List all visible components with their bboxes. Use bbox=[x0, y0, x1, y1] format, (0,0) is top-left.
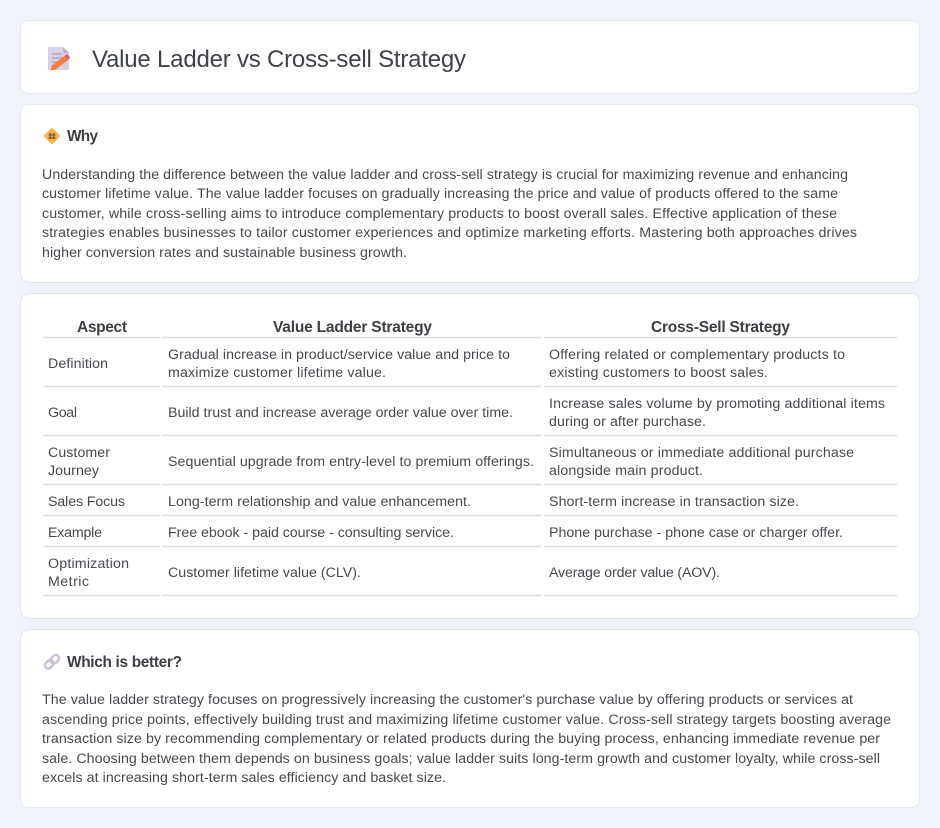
table row: sales focus: Long-term relationship and value enhancement. bbox=[168, 494, 471, 510]
table row: optimization metric: Average order value (AOV). bbox=[549, 565, 720, 581]
panel: title header bbox=[20, 20, 920, 94]
table header row: Cross-Sell Strategy bbox=[651, 319, 790, 336]
table row: sales focus: Short-term increase in transaction size. bbox=[549, 494, 799, 510]
table row: optimization metric: Metric bbox=[48, 574, 89, 590]
table row: definition: Gradual increase in product/service value and price to bbox=[168, 347, 510, 363]
table row: customer journey: alongside main product. bbox=[549, 463, 703, 479]
table row: goal: Increase sales volume by promoting additional items bbox=[549, 396, 885, 412]
text block: why paragraph: customer, while cross-selling aims to introduce complementary products to boost overall sales. Effective application of these bbox=[42, 206, 837, 222]
title: Value Ladder vs Cross-sell Strategy bbox=[92, 46, 466, 73]
table row: optimization metric: Optimization bbox=[48, 556, 129, 572]
text block: why paragraph: Understanding the difference between the value ladder and cross-sell strategy is crucial for maximizing revenue and enhancing bbox=[42, 167, 848, 183]
icon: orange diamond sign bbox=[44, 128, 60, 144]
table row: customer journey bbox=[48, 445, 854, 479]
table row: example: Phone purchase - phone case or charger offer. bbox=[549, 525, 843, 541]
table row: customer journey: Simultaneous or immediate additional purchase bbox=[549, 445, 854, 461]
text block: why paragraph: higher conversion rates and sustainable business growth. bbox=[42, 245, 407, 261]
icon: document with pencil bbox=[48, 47, 70, 70]
table row: goal: Build trust and increase average order value over time. bbox=[168, 405, 513, 421]
table header row: Value Ladder Strategy bbox=[273, 319, 432, 336]
table row: goal: during or after purchase. bbox=[549, 414, 706, 430]
heading: why: Why bbox=[67, 128, 98, 145]
table row: customer journey: Sequential upgrade from entry-level to premium offerings. bbox=[168, 454, 534, 470]
text block: which is better paragraph bbox=[42, 692, 891, 786]
text block: why paragraph bbox=[42, 167, 857, 261]
heading: which is better: Which is better? bbox=[67, 654, 182, 671]
table row: definition: Offering related or complementary products to bbox=[549, 347, 845, 363]
table row: example bbox=[48, 525, 843, 541]
table header row bbox=[77, 319, 790, 336]
table row: optimization metric bbox=[48, 556, 720, 590]
table row: customer journey: Journey bbox=[48, 463, 100, 479]
table row: sales focus bbox=[48, 494, 799, 510]
text block: which is better paragraph: ascending price points, effectively building trust and maximizing lifetime customer value. Cross-sell strategy targets boosting average bbox=[42, 712, 891, 728]
table row: customer journey: Customer bbox=[48, 445, 110, 461]
panel: why bbox=[20, 104, 920, 282]
table header row: Aspect bbox=[77, 319, 127, 336]
table row: example: Example bbox=[48, 525, 102, 541]
table row: sales focus: Sales Focus bbox=[48, 494, 125, 510]
table row: goal bbox=[48, 396, 885, 430]
table row: optimization metric: Customer lifetime value (CLV). bbox=[168, 565, 361, 581]
text block: which is better paragraph: sale. Choosing between them depends on business goals; value ladder suits long-term growth and customer loyalty, while cross-sell bbox=[42, 751, 880, 767]
table row: definition: maximize customer lifetime value. bbox=[168, 365, 386, 381]
table row: example: Free ebook - paid course - consulting service. bbox=[168, 525, 454, 541]
text block: which is better paragraph: The value ladder strategy focuses on progressively increasing the customer's purchase value by offering products or services at bbox=[42, 692, 853, 708]
text block: which is better paragraph: excels at increasing short-term sales efficiency and basket size. bbox=[42, 770, 446, 786]
text block: why paragraph: strategies enables businesses to tailor customer experiences and optimize marketing efforts. Mastering both approaches drives bbox=[42, 225, 857, 241]
text block: which is better paragraph: transaction size by recommending complementary or related products during the buying process, enhancing immediate revenue per bbox=[42, 731, 880, 747]
table row: definition bbox=[48, 347, 845, 381]
table row: goal: Goal bbox=[48, 405, 77, 421]
text block: why paragraph: customer lifetime value. The value ladder focuses on gradually increasing the price and value of products offered to the same bbox=[42, 186, 838, 202]
icon: chain link bbox=[44, 654, 60, 670]
panel: comparison table bbox=[20, 294, 920, 618]
table row: definition: Definition bbox=[48, 356, 108, 372]
table row: definition: existing customers to boost sales. bbox=[549, 365, 768, 381]
panel: which is better bbox=[20, 630, 920, 808]
